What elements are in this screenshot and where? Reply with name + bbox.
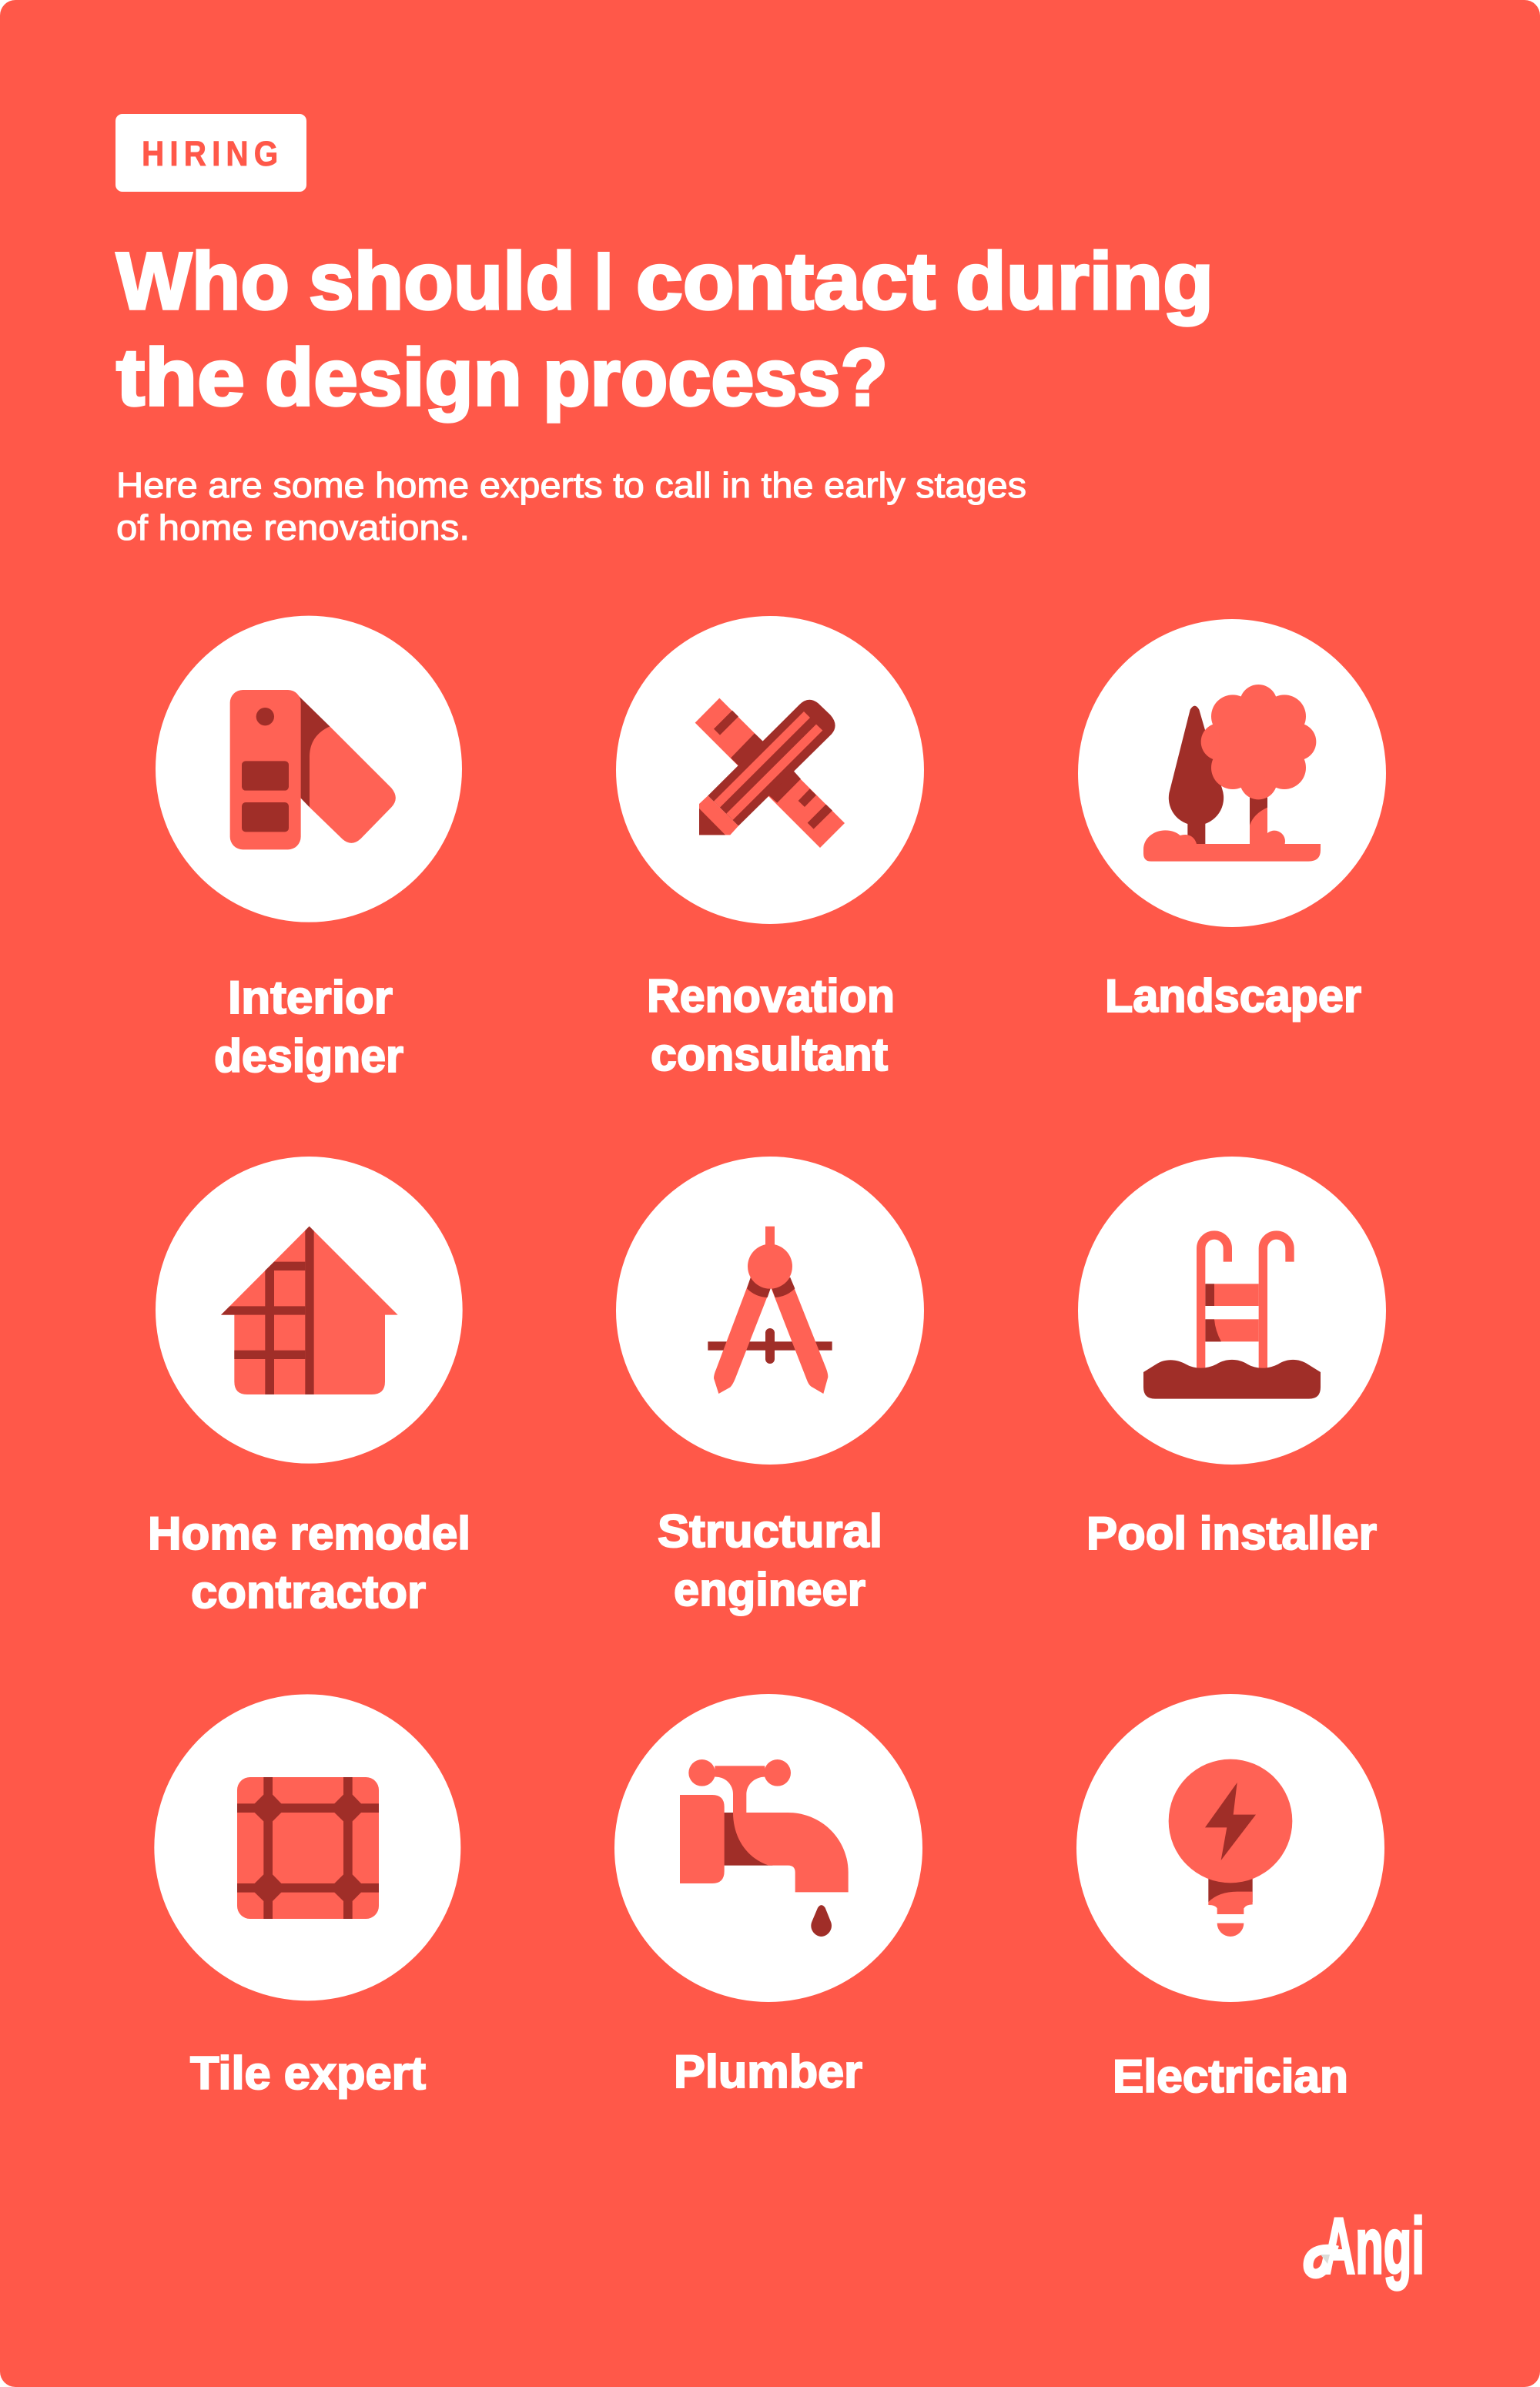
panel: pool installer: [1078, 1157, 1386, 1559]
tag: hiring: [116, 114, 306, 192]
label: plumber: Plumber: [674, 2046, 862, 2097]
logo: Angi: [1308, 2201, 1424, 2290]
title: I: [594, 236, 613, 326]
label: home remodel contractor: Home remodel: [148, 1508, 470, 1559]
label: interior designer: designer: [214, 1030, 403, 1082]
title: design: [265, 333, 522, 423]
ground and bushes: [1143, 830, 1321, 862]
title: process?: [543, 333, 888, 423]
panel: landscaper: [1078, 619, 1386, 1022]
panel: home remodel contractor: [148, 1157, 470, 1618]
icon: light bulb with bolt: [1076, 1694, 1384, 2002]
subtitle: of home renovations.: [116, 507, 470, 547]
label: structural engineer: engineer: [674, 1564, 865, 1615]
label: home remodel contractor: contractor: [191, 1566, 426, 1618]
icon: floor tile: [154, 1694, 460, 2000]
panel: tile expert: [154, 1694, 460, 2099]
label: structural engineer: [658, 1505, 882, 1615]
label: interior designer: [214, 972, 403, 1082]
icon: pool ladder and water: [1078, 1157, 1386, 1465]
subtitle: Here are some home experts to call in the early stages: [116, 465, 1026, 505]
label: pool installer: Pool installer: [1086, 1508, 1377, 1559]
label: structural engineer: Structural: [658, 1505, 882, 1557]
panel: plumber: [614, 1694, 922, 2097]
label: electrician: Electrician: [1113, 2051, 1348, 2102]
subtitle: [116, 465, 1026, 547]
label: interior designer: Interior: [228, 972, 393, 1023]
title: should: [309, 236, 575, 326]
title: [116, 236, 1214, 423]
title: contact: [636, 236, 936, 326]
title: the: [116, 333, 245, 423]
icon: house with framing: [156, 1157, 463, 1464]
label: landscaper: Landscaper: [1105, 970, 1361, 1022]
label: renovation consultant: Renovation: [647, 970, 895, 1022]
panel: electrician: [1076, 1694, 1384, 2102]
panel: interior designer: [156, 616, 462, 1082]
tag: hiring: HIRING: [142, 135, 278, 174]
title: Who: [116, 236, 290, 326]
icon: colour swatch: [156, 616, 462, 922]
label: home remodel contractor: [148, 1508, 470, 1618]
label: tile expert: Tile expert: [190, 2047, 426, 2099]
title: during: [956, 236, 1214, 326]
tree crown: [1201, 685, 1316, 799]
icon: trees and ground: [1078, 619, 1386, 927]
logo: Angi: Angi: [1322, 2201, 1424, 2290]
label: renovation consultant: [647, 970, 895, 1080]
icon: ruler and pencil: [616, 616, 924, 924]
label: renovation consultant: consultant: [651, 1029, 888, 1080]
icon: drafting compass: [616, 1157, 924, 1465]
panel: renovation consultant: [616, 616, 924, 1080]
panel: structural engineer: [616, 1157, 924, 1615]
icon: dripping faucet: [614, 1694, 922, 2002]
